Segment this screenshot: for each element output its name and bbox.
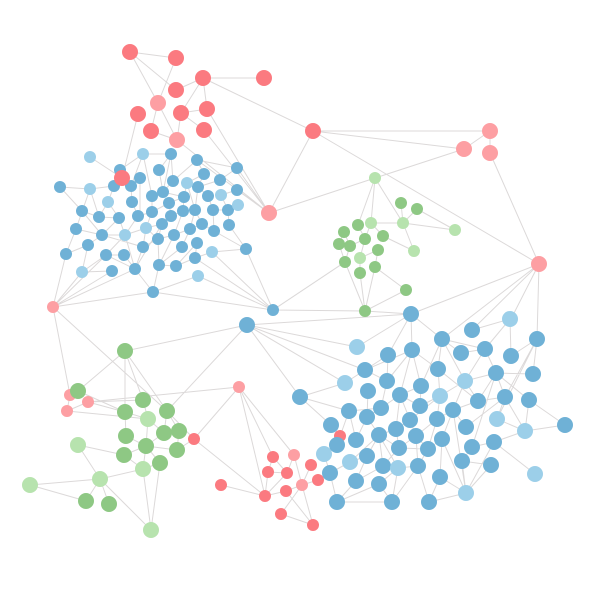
community: top red nodes [114, 44, 547, 272]
network edges [30, 52, 565, 530]
community: bottom red nodes [47, 301, 346, 531]
community: upper-left blue cluster [54, 148, 279, 316]
community: upper-right green cluster [333, 172, 461, 317]
community: lower-right blue cluster [239, 306, 573, 510]
community: lower-left green cluster [22, 343, 187, 538]
